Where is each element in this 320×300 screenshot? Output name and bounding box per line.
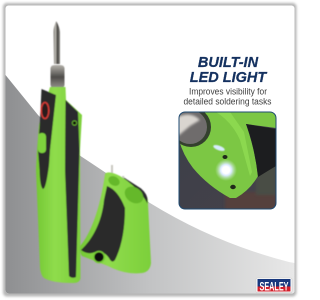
heading: BUILT-IN <box>198 55 259 71</box>
grey background swoosh <box>6 75 294 294</box>
holder pins <box>111 165 124 200</box>
green-grey right backdrop <box>256 165 276 195</box>
black side panel <box>65 100 80 278</box>
infographic canvas: LED LIGHT <box>190 70 267 86</box>
black front panel <box>38 89 56 189</box>
holder body <box>80 172 151 273</box>
soldering iron <box>36 22 82 283</box>
brown table <box>225 192 276 210</box>
LED <box>215 159 237 181</box>
bright rim highlight <box>216 112 252 176</box>
holder grip <box>81 186 125 262</box>
description: Improves visibility for <box>189 86 267 96</box>
green button <box>38 133 46 153</box>
LED close-up photo <box>178 112 276 210</box>
iron holder cap <box>80 165 151 273</box>
dark rim <box>124 178 147 202</box>
description <box>184 86 272 106</box>
iron body <box>36 87 82 283</box>
LED glare <box>213 144 225 152</box>
holder sockets <box>107 174 146 207</box>
SEALEY logo <box>256 278 292 294</box>
holder hole <box>94 252 104 262</box>
metal collar <box>180 112 211 147</box>
side port <box>72 121 77 125</box>
power switch ring <box>41 102 49 118</box>
iron tip <box>54 22 60 64</box>
description: detailed soldering tasks <box>184 96 272 106</box>
iron collar <box>50 65 64 89</box>
black grip <box>246 124 276 177</box>
green nose and top band <box>179 112 276 198</box>
screw holes <box>222 155 228 159</box>
